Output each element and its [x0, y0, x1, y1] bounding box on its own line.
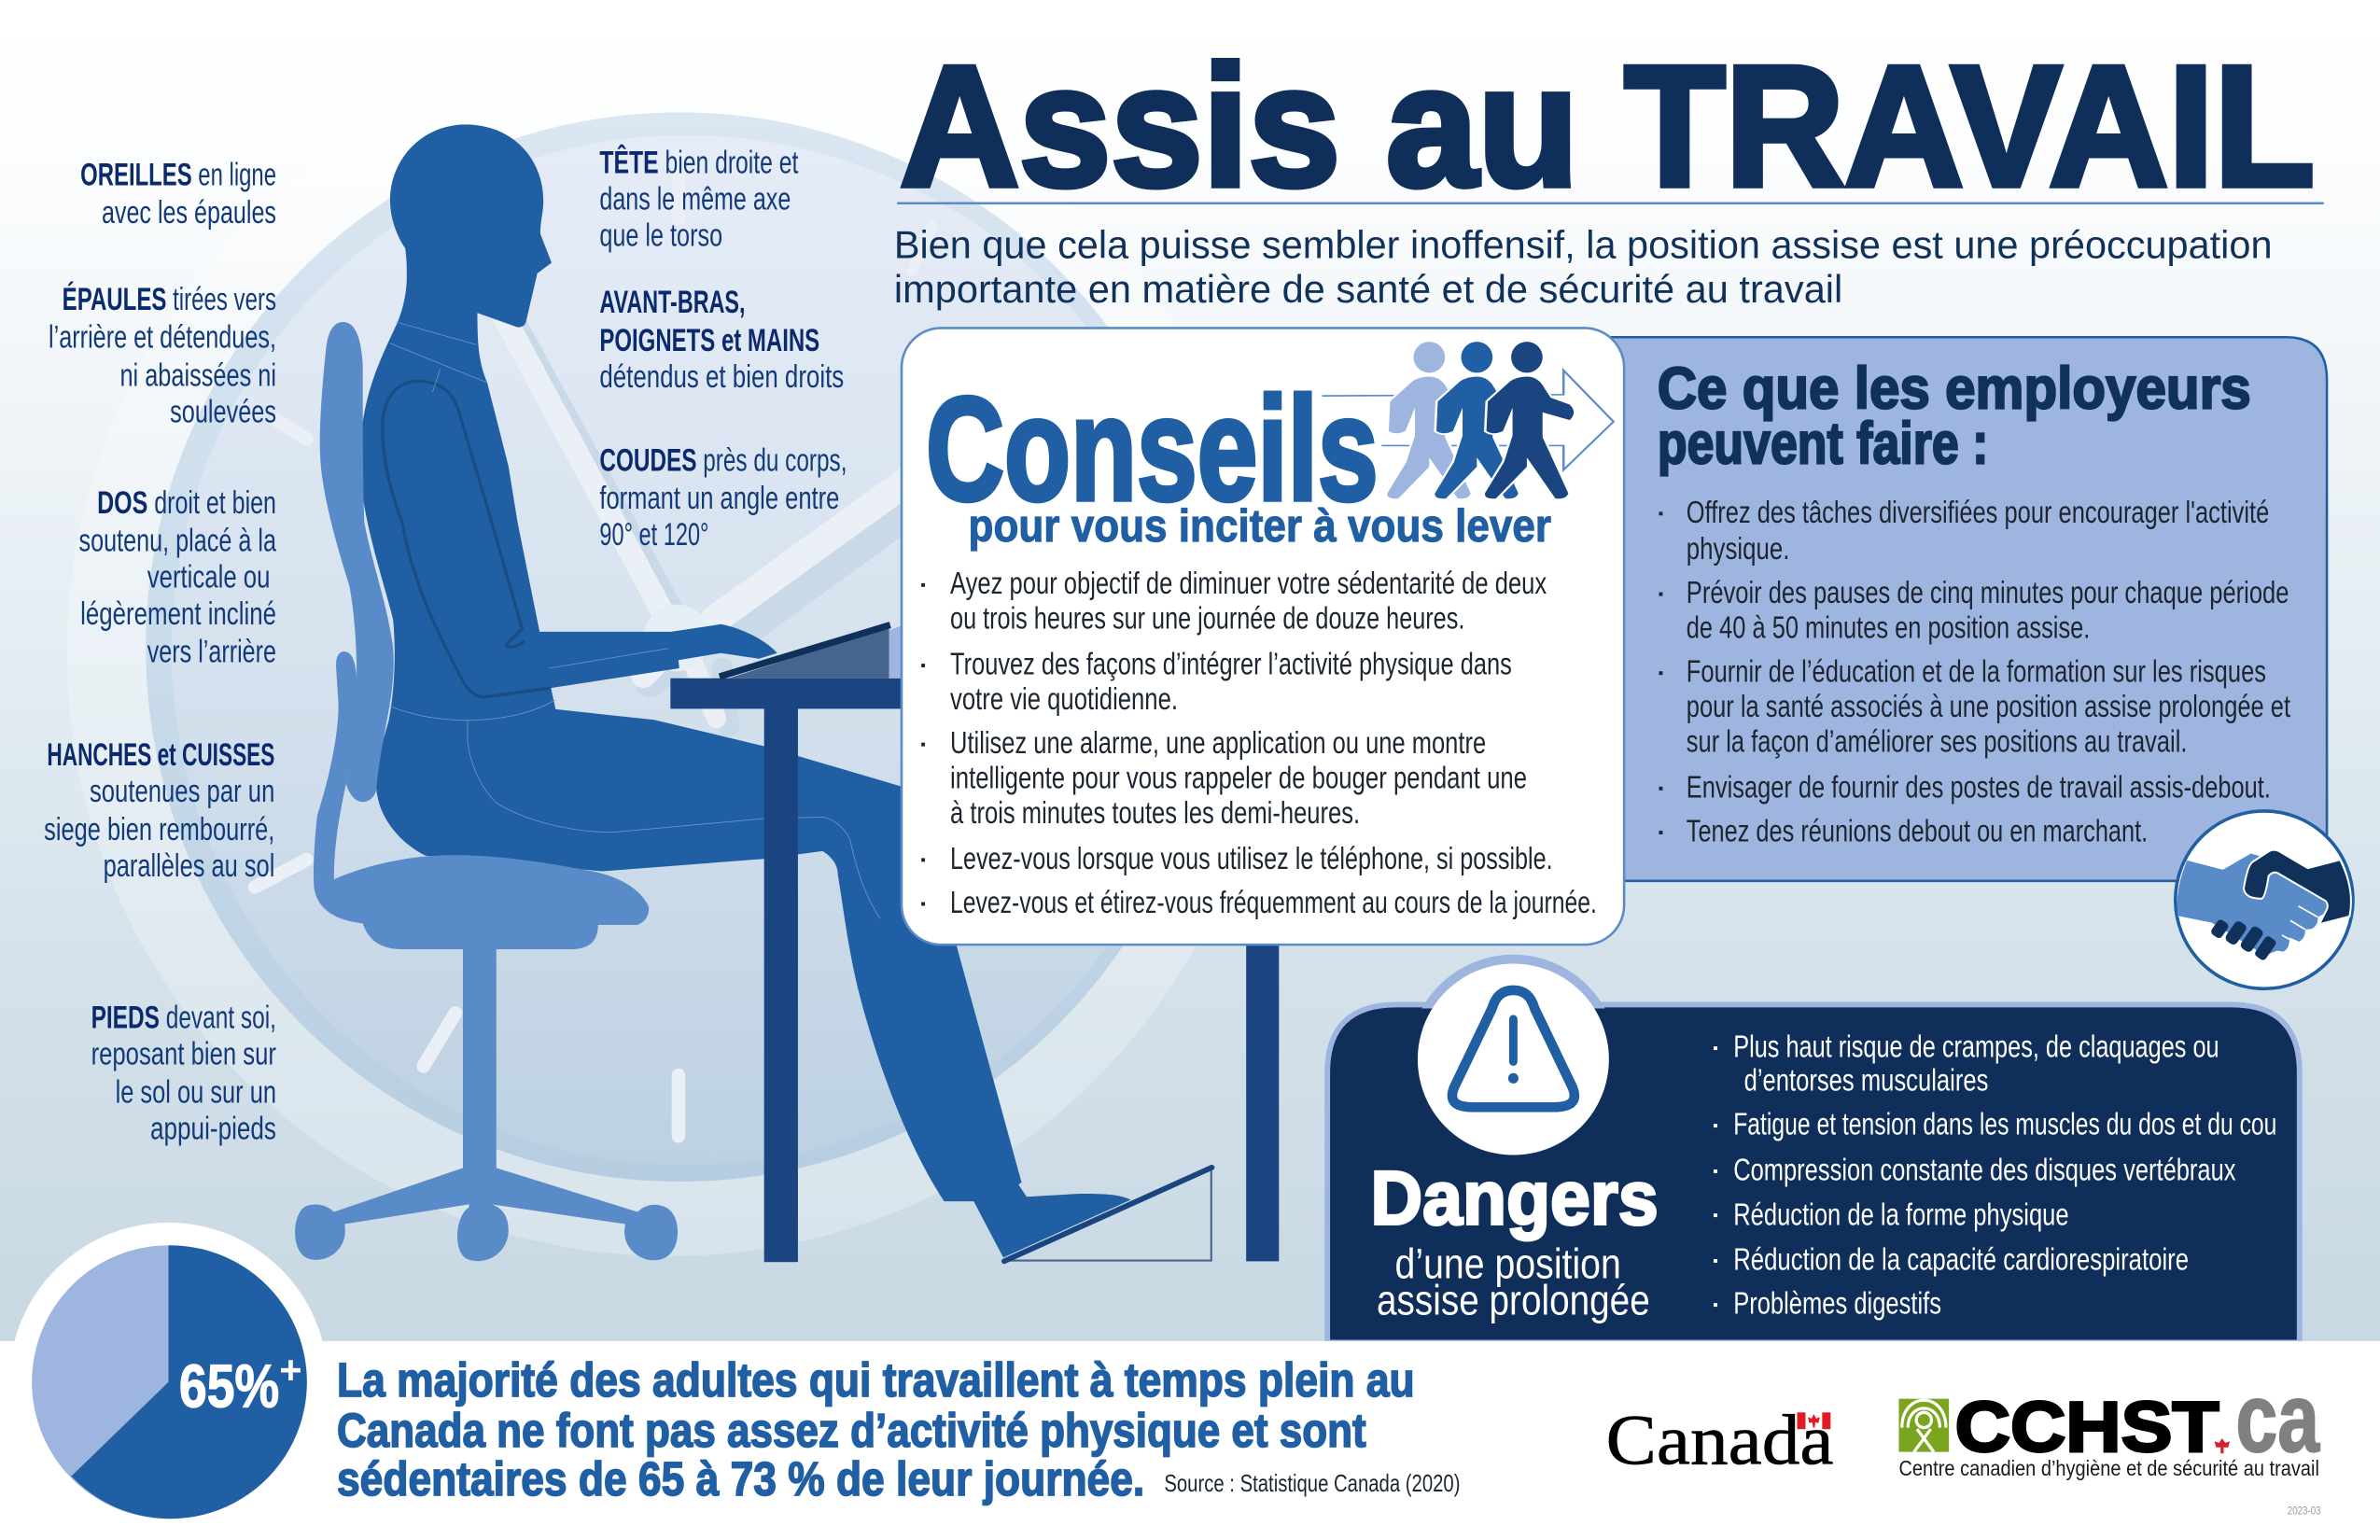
employers list: sur la façon d’améliorer ses positions au travail.	[1687, 724, 2187, 759]
dangers list: Réduction de la capacité cardiorespiratoire	[1733, 1242, 2189, 1277]
subtitle: importante en matière de santé et de sécurité au travail	[894, 267, 1842, 311]
footrest	[1003, 1168, 1211, 1261]
posture labels: left column	[44, 158, 276, 1146]
label: dos: soutenu, placé à la	[79, 524, 276, 559]
logo: CCHST: CCHST	[1955, 1388, 2219, 1467]
conseils heading: Conseils	[926, 367, 1379, 531]
label: oreilles	[80, 158, 276, 231]
employers list: physique.	[1687, 532, 1789, 567]
label: avant-bras: AVANT-BRAS,	[599, 285, 746, 320]
dangers list: d’entorses musculaires	[1744, 1063, 1988, 1098]
dangers list	[1714, 1030, 2276, 1322]
logo: CCHST: ca	[2236, 1365, 2320, 1473]
label: avant-bras: détendus et bien droits	[599, 359, 844, 395]
title: Assis au TRAVAIL	[900, 30, 2315, 222]
label: oreilles: avec les épaules	[102, 195, 276, 231]
label: tête: que le torso	[599, 218, 722, 254]
person silhouette	[359, 124, 1131, 1257]
label: pieds: appui-pieds	[150, 1111, 276, 1146]
conseils list: ou trois heures sur une journée de douze heures.	[950, 602, 1464, 637]
source note: Source : Statistique Canada (2020)	[1164, 1469, 1460, 1497]
pie chart: 65%	[9, 1223, 328, 1540]
pie chart: 65%: +	[279, 1348, 302, 1392]
label: avant-bras: POIGNETS et MAINS	[599, 323, 819, 358]
laptop	[720, 625, 902, 679]
conseils list	[921, 567, 1597, 920]
label: épaules: soulevées	[170, 394, 276, 429]
label: épaules	[49, 280, 276, 429]
conseils list: intelligente pour vous rappeler de bouger pendant une	[950, 762, 1527, 796]
label: dos: légèrement incliné	[80, 596, 276, 632]
dangers list: Problèmes digestifs	[1733, 1287, 1941, 1322]
label: coudes	[599, 442, 847, 553]
dangers subheading: assise prolongée	[1377, 1276, 1650, 1323]
panel: conseils	[902, 328, 1624, 945]
statistic text: La majorité des adultes qui travaillent à temps plein au	[337, 1353, 1415, 1407]
subtitle: Bien que cela puisse sembler inoffensif, la position assise est une préoccupation	[894, 223, 2273, 267]
label: tête	[599, 143, 799, 254]
label: dos: DOS droit et bien	[97, 485, 276, 521]
statistic text: Canada ne font pas assez d’activité physique et sont	[337, 1404, 1366, 1457]
chair	[295, 322, 678, 1261]
dangers list: Compression constante des disques vertébraux	[1733, 1153, 2236, 1187]
employers heading	[1658, 357, 2251, 476]
icon: warning	[1418, 963, 1609, 1155]
icon: handshake	[2176, 811, 2353, 988]
conseils list: Levez-vous lorsque vous utilisez le téléphone, si possible.	[950, 842, 1553, 876]
panel: dangers	[1327, 955, 2300, 1342]
label: hanches et cuisses	[44, 737, 274, 884]
label: dos: verticale ou	[147, 560, 270, 595]
employers heading: peuvent faire :	[1658, 411, 1988, 476]
label: coudes: formant un angle entre	[599, 481, 839, 516]
label: oreilles: OREILLES en ligne	[80, 158, 276, 193]
clock background	[67, 50, 1272, 1256]
dangers list: Plus haut risque de crampes, de claquages ou	[1733, 1030, 2219, 1065]
desk	[670, 679, 1279, 1262]
conseils list: à trois minutes toutes les demi-heures.	[950, 796, 1360, 831]
statistic text	[337, 1353, 1415, 1505]
label: hanches et cuisses: siege bien rembourré,	[44, 812, 274, 847]
label: épaules: l’arrière et détendues,	[49, 320, 276, 356]
dangers list: Réduction de la forme physique	[1733, 1197, 2069, 1232]
employers heading: Ce que les employeurs	[1658, 357, 2251, 422]
logo: CCHST: Centre canadien d’hygiène et de sécurité au travail	[1898, 1456, 2319, 1480]
conseils list: votre vie quotidienne.	[950, 682, 1178, 717]
label: avant-bras	[599, 285, 844, 395]
label: hanches et cuisses: parallèles au sol	[104, 848, 274, 884]
label: pieds	[91, 1001, 276, 1146]
edition date: 2023-03	[2288, 1504, 2321, 1517]
subtitle	[894, 223, 2273, 311]
employers list: de 40 à 50 minutes en position assise.	[1687, 610, 2090, 645]
dangers heading: Dangers	[1371, 1156, 1659, 1241]
label: pieds: PIEDS devant soi,	[91, 1001, 276, 1036]
footer band	[0, 1341, 2380, 1540]
label: tête: TÊTE bien droite et	[599, 143, 799, 181]
employers list: Tenez des réunions debout ou en marchant.	[1687, 814, 2148, 848]
label: hanches et cuisses: HANCHES et CUISSES	[47, 737, 274, 773]
posture labels: centre column	[599, 143, 847, 553]
label: coudes: 90° et 120°	[599, 517, 708, 553]
pie chart: 65%: 65%	[179, 1352, 279, 1421]
conseils subheading: pour vous inciter à vous lever	[969, 501, 1551, 552]
label: pieds: le sol ou sur un	[116, 1074, 276, 1110]
label: coudes: COUDES près du corps,	[599, 442, 847, 478]
seated worker illustration	[295, 124, 1279, 1262]
conseils list: Ayez pour objectif de diminuer votre sédentarité de deux	[950, 567, 1547, 601]
conseils list: Trouvez des façons d’intégrer l’activité physique dans	[950, 647, 1512, 681]
logo: Canada: Canada	[1606, 1401, 1834, 1480]
conseils list: Levez-vous et étirez-vous fréquemment au cours de la journée.	[950, 886, 1597, 920]
panel: employers	[1578, 337, 2327, 881]
employers list	[1659, 496, 2291, 848]
label: épaules: ni abaissées ni	[119, 357, 276, 393]
label: pieds: reposant bien sur	[91, 1037, 276, 1072]
statistic text: sédentaires de 65 à 73 % de leur journée.	[337, 1452, 1144, 1505]
label: dos: vers l’arrière	[147, 634, 276, 669]
icon: walking figures with arrow	[1323, 342, 1614, 498]
logo: CCHST	[1898, 1365, 2320, 1480]
arm outline	[383, 322, 880, 918]
label: dos	[79, 485, 276, 669]
dangers subheading	[1377, 1239, 1650, 1323]
conseils list: Utilisez une alarme, une application ou une montre	[950, 726, 1486, 761]
label: épaules: ÉPAULES tirées vers	[63, 280, 276, 317]
dangers subheading: d’une position	[1395, 1239, 1621, 1287]
label: hanches et cuisses: soutenues par un	[90, 774, 274, 809]
label: tête: dans le même axe	[599, 182, 791, 217]
